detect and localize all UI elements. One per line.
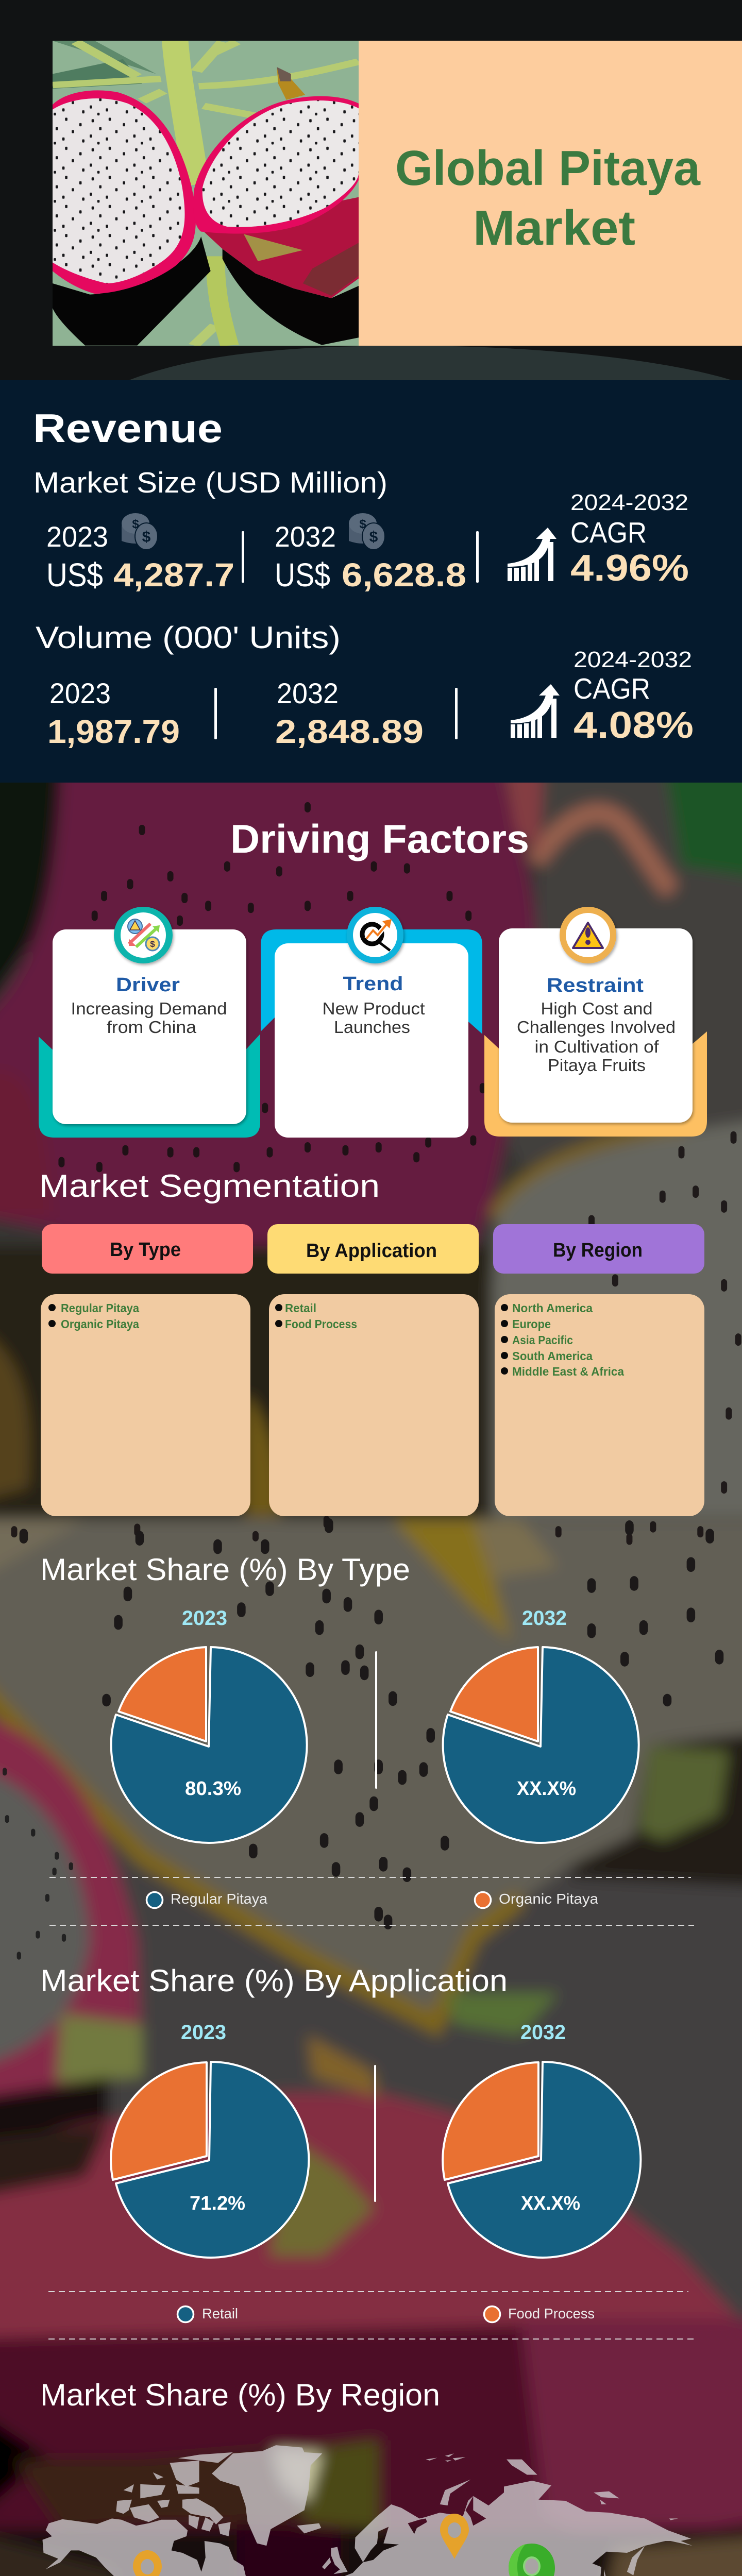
icon: pin north america [133,2550,162,2576]
text: driver: Driver [116,974,180,996]
text: trend: New Product [323,999,425,1018]
panel: restraint card [484,907,707,1137]
stat: volume CAGR: 2024-2032 [574,647,692,672]
seeds on fruit flesh [5,805,738,1957]
icon: trend [347,907,403,963]
text: trend [323,973,425,1037]
legend: type [146,1891,598,1908]
divider [214,688,217,739]
pie chart: application 2032: XX.X% [521,2193,580,2214]
world map [42,2445,693,2576]
icon: coins 2023 [122,513,158,550]
segment list: region [495,1294,704,1516]
title: Market [473,200,635,256]
pie chart: application 2023 [111,2062,309,2258]
segment list: type [41,1294,250,1516]
stat: market size CAGR: 2024-2032 [570,490,688,515]
stat: market size CAGR: CAGR [570,516,647,549]
heading: volume: Volume (000' Units) [36,620,341,655]
icon: growth arrow [508,528,556,581]
segment list: type: Organic Pitaya [61,1317,139,1331]
icon: driver [114,907,173,963]
icon: growth arrow [511,684,560,738]
divider [242,531,244,583]
pie chart: type 2023: 80.3% [185,1778,241,1800]
legend: application [177,2306,595,2323]
icon: coins 2023: $ [142,529,151,546]
stat: market size 2032 [275,520,466,594]
stat: volume 2023 [47,677,180,750]
heading: market size: Market Size (USD Million) [33,466,387,499]
title: Global Pitaya [395,141,701,196]
stat: volume 2032: 2032 [277,677,339,709]
pie chart: type 2023 [111,1647,307,1843]
stat: market size 2032: 2032 [275,520,336,553]
icon: coins 2032: $ [369,529,378,546]
segment list: type: Regular Pitaya [61,1301,139,1315]
text: driver [71,974,227,1037]
stat: volume CAGR: CAGR [574,672,650,705]
icon: coins 2032 [349,513,385,550]
text: restraint: High Cost and [541,999,652,1018]
background: dragon fruit photo [0,752,742,2576]
title panel [359,41,742,346]
text: restraint [517,975,676,1075]
divider [455,688,458,739]
heading: market share by region: Market Share (%) By Region [40,2378,440,2412]
stat: market size 2023: 2023 [46,520,108,553]
segment list: region: South America [512,1349,593,1363]
segment list: region: North America [512,1301,593,1315]
segment list: region: Asia Pacific [512,1333,573,1347]
pie chart: type 2032: XX.X% [517,1778,576,1800]
icon: pin asia pacific [509,2544,555,2576]
pie chart: application 2023: 71.2% [190,2193,245,2214]
stat: volume 2032: 2,848.89 [275,713,424,750]
background: dark slate header [0,0,742,380]
map: eurasia, africa, oceania [314,2453,693,2576]
segment header: by region [493,1224,704,1274]
segment list: application [269,1294,479,1516]
heading: market share by type: Market Share (%) By Type [40,1552,410,1587]
segment header: by region: By Region [553,1240,643,1261]
dashed lines [49,1877,694,1925]
segment header: by application: By Application [306,1240,437,1262]
dashed lines [48,2292,694,2339]
stat: volume CAGR [574,647,694,746]
heading: revenue: Revenue [33,405,223,451]
hero photo: halved dragon fruit [52,41,359,346]
panel: driver card [39,907,260,1138]
divider [374,2065,376,2202]
title [395,141,701,256]
stat: market size CAGR [570,490,689,589]
segment list: application: Food Process [285,1317,357,1331]
stat: market size 2032: 6,628.8 [342,556,466,594]
panel: trend card [261,907,482,1138]
heading: market segmentation: Market Segmentation [39,1168,380,1204]
segment header: by type: By Type [110,1239,181,1261]
text: trend: Launches [334,1018,410,1037]
map: americas and greenland [42,2445,322,2576]
segment list: region: Europe [512,1317,551,1331]
legend: type: Organic Pitaya [499,1891,598,1907]
stat: market size 2023: 4,287.7 [113,556,234,594]
segment list: region: Middle East & Africa [512,1365,624,1378]
icon: coins 2023: $ [132,517,139,531]
heading: driving factors: Driving Factors [230,816,529,861]
panel: revenue [0,380,742,783]
icon: restraint [560,907,616,963]
legend: application: Food Process [508,2306,595,2321]
stat: market size 2023 [46,520,234,594]
stat: market size 2032: US$ [275,556,330,594]
heading: market share by application: Market Share (%) By Application [40,1963,508,1998]
icon: driver: $ [150,939,155,949]
stat: market size CAGR: 4.96% [570,548,689,589]
text: restraint: Restraint [547,975,644,996]
stat: volume 2023: 2023 [49,677,111,709]
stat: volume CAGR: 4.08% [574,705,694,746]
stat: market size 2023: US$ [46,556,103,594]
text: restraint: in Cultivation of [535,1037,659,1056]
text: restraint: Pitaya Fruits [548,1056,646,1075]
icon: coins 2032: $ [359,517,366,531]
legend: application: Retail [202,2306,238,2321]
stat: volume 2032 [275,677,424,750]
year label 2032: 2032 [520,2021,566,2044]
year label 2023: 2023 [182,1607,227,1630]
stat: volume 2023: 1,987.79 [47,713,180,750]
segment header: by type [42,1224,253,1274]
segment list: application: Retail [285,1301,316,1315]
pie chart: application 2032 [443,2062,640,2258]
year label 2023: 2023 [181,2021,226,2044]
segment header: by application [267,1224,479,1274]
year label 2032: 2032 [522,1607,567,1630]
pie chart: type 2032 [443,1647,639,1843]
text: driver: Increasing Demand [71,999,227,1018]
divider [375,1651,377,1789]
divider [476,531,479,583]
text: trend: Trend [343,973,403,995]
icon: pin europe [440,2514,469,2559]
legend: type: Regular Pitaya [171,1891,267,1907]
text: driver: from China [107,1018,197,1037]
text: restraint: Challenges Involved [517,1018,676,1037]
